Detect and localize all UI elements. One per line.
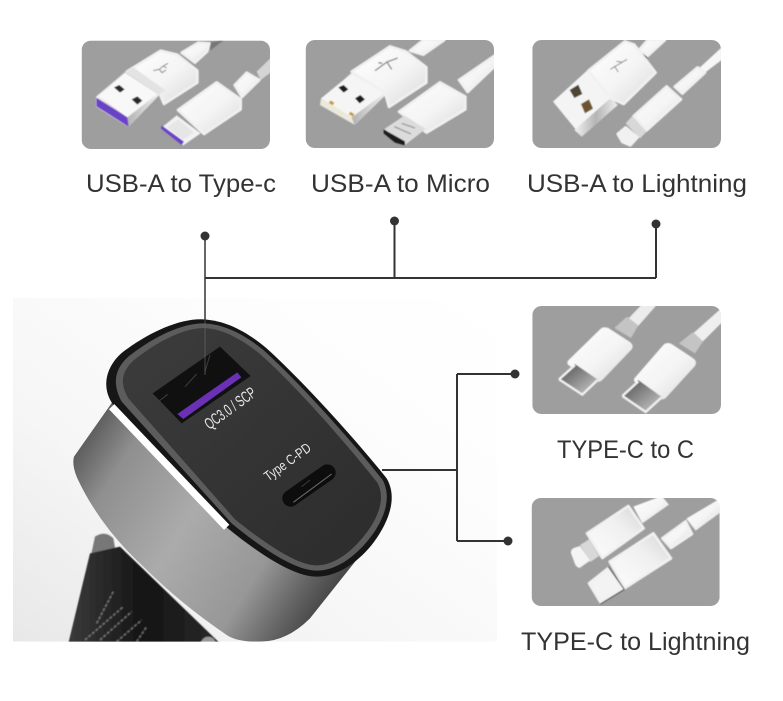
charger face (123, 328, 381, 565)
charger metal body (73, 402, 362, 642)
right Type-C plug (622, 307, 722, 412)
Type-C plug (161, 58, 271, 145)
chrome band (112, 407, 227, 527)
photo: car charger (13, 319, 398, 642)
heading: USB-A to Type-c: USB-A to Type-c (86, 170, 276, 198)
USB-A plug (320, 40, 444, 125)
Type-C plug (589, 498, 721, 604)
Type-C port (291, 473, 332, 502)
heading: USB-A to Lightning: USB-A to Lightning (527, 170, 747, 198)
panel: USB-A to Lightning cable photo (532, 40, 722, 148)
panel: USB-A to Type-C cable photo (82, 40, 271, 149)
charger plug barrel (68, 534, 220, 643)
heading: TYPE-C to C: TYPE-C to C (557, 436, 694, 464)
panel: Type-C to Lightning cable photo (532, 496, 721, 606)
Lightning plug (571, 496, 669, 568)
Lightning plug (618, 47, 722, 145)
USB-A port (153, 347, 251, 423)
heading: TYPE-C to Lightning: TYPE-C to Lightning (521, 628, 750, 656)
left Type-C plug (558, 305, 657, 395)
USB-A plug (96, 40, 224, 127)
label: QC3.0 / SCP: QC3.0 / SCP (202, 385, 260, 433)
connector: Type-C port to cables (382, 370, 520, 546)
heading: USB-A to Micro: USB-A to Micro (311, 170, 490, 198)
Micro-USB plug (384, 55, 495, 145)
USB-A plug (553, 40, 665, 137)
charger face ring (116, 323, 387, 571)
connector: USB-A cables to charger port (200, 216, 660, 375)
panel: Type-C to Type-C cable photo (532, 305, 722, 414)
charger black rim (106, 319, 392, 577)
label: Type C-PD: Type C-PD (261, 439, 314, 484)
panel: USB-A to Micro cable photo (306, 40, 495, 148)
